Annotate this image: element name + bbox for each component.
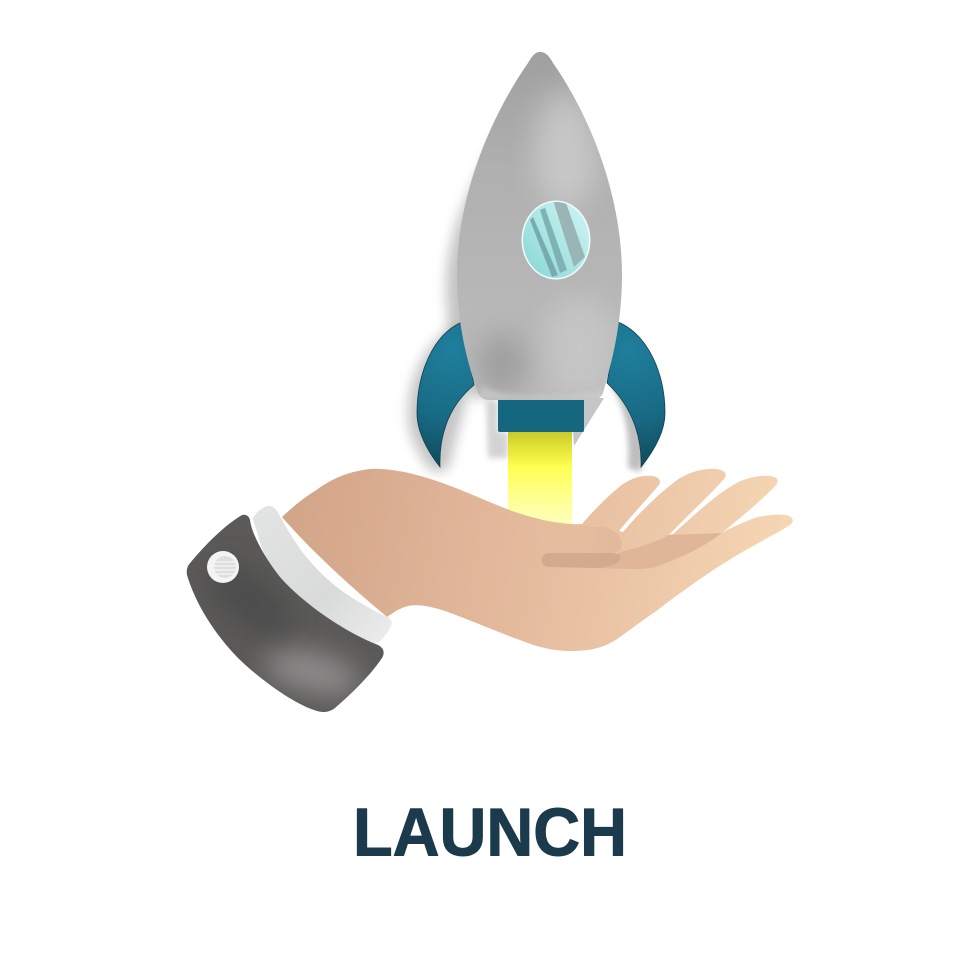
nozzle xyxy=(498,399,584,432)
button xyxy=(207,551,239,583)
shirt cuff xyxy=(253,506,392,644)
palm crease xyxy=(542,533,722,569)
left fin xyxy=(417,322,474,467)
porthole xyxy=(522,200,590,280)
fingers and palm xyxy=(282,469,793,651)
hand xyxy=(282,469,793,651)
title: LAUNCH xyxy=(353,794,627,870)
thumb xyxy=(540,520,622,553)
right fin xyxy=(607,322,665,467)
rocket body xyxy=(457,52,622,400)
infographic xyxy=(186,52,793,856)
jacket sleeve xyxy=(186,514,384,712)
sleeve shading xyxy=(259,640,365,704)
rocket xyxy=(408,40,665,528)
nozzle flame xyxy=(508,432,572,528)
rocket soft shadow xyxy=(408,130,650,472)
body highlight xyxy=(534,90,598,210)
body lower shade xyxy=(476,333,528,397)
